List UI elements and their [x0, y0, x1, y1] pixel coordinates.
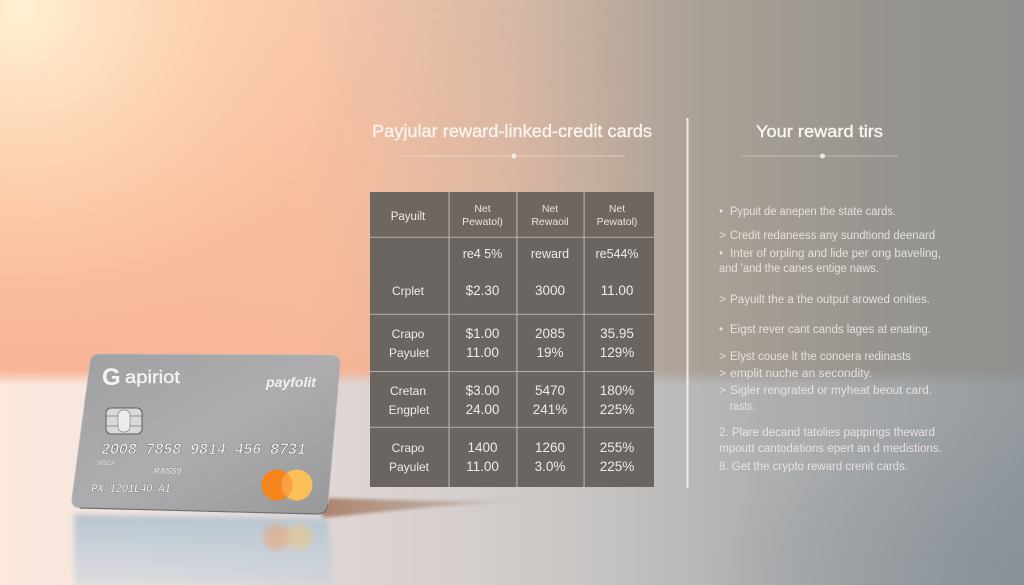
- panel: reward tips list: >: [719, 294, 726, 306]
- table row 1: [392, 247, 639, 298]
- credit card: apiriot: [125, 367, 180, 387]
- panel: reward tips list: Sigler rengrated or myheat beout card.: [730, 385, 932, 397]
- panel: reward tips list: •: [719, 248, 723, 260]
- table row 3: [389, 383, 634, 417]
- table row 2: 2085: [535, 326, 565, 341]
- card shadow on table surface: [322, 498, 525, 518]
- table row 3: 180%: [600, 383, 634, 398]
- table row 2: [389, 326, 634, 360]
- panel: reward tips list: Credit redaneess any sundtiond deenard: [730, 230, 935, 242]
- panel: reward tips list: [719, 206, 942, 473]
- credit card: [72, 354, 340, 514]
- card brand logo: G: [102, 364, 121, 391]
- table row 4: 255%: [600, 440, 634, 455]
- panel: reward tips list: Payuilt the a the output arowed onities.: [730, 294, 930, 306]
- table row 2: 129%: [600, 345, 634, 360]
- table row 1: Crplet: [392, 284, 425, 298]
- panel: reward tips list: >: [719, 368, 726, 380]
- panel: reward tips list: Elyst couse lt the conoera redinasts: [730, 351, 911, 363]
- panel: reward tips list: >: [719, 385, 726, 397]
- panel: reward tips list: mpoutt cantodations epert an d medistions.: [719, 443, 942, 455]
- table row 1: re544%: [595, 247, 639, 261]
- table row 1: 3000: [535, 283, 565, 298]
- vertical divider line: [686, 118, 688, 488]
- table row 3: $3.00: [466, 383, 499, 398]
- card small labels: VISCA: [97, 461, 115, 467]
- table row 2: 19%: [536, 345, 564, 360]
- table row 1: re4 5%: [463, 247, 502, 261]
- table row 4: 225%: [600, 459, 634, 474]
- table row 1: $2.30: [466, 283, 499, 298]
- table row 2: $1.00: [466, 326, 499, 341]
- left heading: popular reward-linked credit cards: [372, 121, 652, 158]
- card number: 2008 7858 9814 456 8731: [101, 441, 306, 459]
- table header row: [391, 203, 637, 228]
- panel: reward tips list: •: [719, 206, 723, 218]
- panel: reward tips list: and 'and the canes entige naws.: [719, 263, 879, 275]
- panel: reward tips list: Eigst rever cant cands lages at enating.: [730, 324, 931, 336]
- table row 2: Crapo: [392, 327, 425, 341]
- table header row: Payuilt: [391, 211, 426, 223]
- table row 4: 11.00: [466, 459, 499, 474]
- panel: reward tips list: >: [719, 351, 726, 363]
- table row 4: 1400: [467, 440, 498, 455]
- table header row: Pewatol): [597, 216, 637, 228]
- table header row: Rewaoil: [531, 216, 569, 228]
- panel: reward tips list: Pypuit de anepen the state cards.: [730, 206, 896, 218]
- table row 1: reward: [531, 247, 569, 261]
- table row 3: Engplet: [389, 403, 430, 417]
- right heading: your reward tiers: [742, 122, 898, 158]
- table row 3: 5470: [535, 383, 565, 398]
- panel: reward tips list: 8. Get the crypto reward crenit cards.: [719, 461, 908, 473]
- panel: reward tips list: rasts.: [730, 401, 755, 413]
- table header row: Pewatol): [462, 216, 503, 228]
- table row 2: 35.95: [600, 326, 634, 341]
- table header row: Net: [609, 203, 625, 215]
- credit card: PX 1201L40 A1: [91, 483, 171, 496]
- panel: reward tips list: >: [719, 230, 726, 242]
- panel: reward tips list: Inter of orpling and lide per ong baveling,: [730, 248, 941, 260]
- panel: reward tips list: 2. Plare decand tatolies pappings theward: [719, 427, 935, 439]
- table row 3: 225%: [600, 402, 634, 417]
- left heading: popular reward-linked credit cards: Payjular reward-linked-credit cards: [372, 121, 652, 141]
- table row 4: Crapo: [392, 441, 425, 455]
- panel: reward tips list: •: [719, 324, 723, 336]
- table row 1: 11.00: [601, 283, 633, 298]
- table row 3: Cretan: [390, 384, 426, 398]
- table header row: Net: [542, 203, 558, 215]
- table row 2: 11.00: [466, 345, 499, 360]
- right heading: your reward tiers: Your reward tirs: [756, 122, 883, 141]
- table header row: Net: [474, 203, 491, 215]
- table row 2: Payulet: [389, 346, 430, 360]
- table row 4: [389, 440, 634, 474]
- icon: two-circle card network logo: [262, 470, 312, 500]
- card reflection: [74, 514, 334, 585]
- table row 3: 241%: [533, 402, 567, 417]
- table row 4: 1260: [535, 440, 565, 455]
- panel: reward tips list: emplit nuche an secondity.: [730, 368, 872, 380]
- icon: card chip: [106, 408, 142, 434]
- table row 3: 24.00: [466, 402, 499, 417]
- credit card: RASS9: [154, 466, 181, 476]
- panel: rewards table: [370, 192, 654, 487]
- table row 4: Payulet: [389, 460, 430, 474]
- card issuer name: payfolit: [265, 375, 317, 390]
- table row 4: 3.0%: [535, 459, 565, 474]
